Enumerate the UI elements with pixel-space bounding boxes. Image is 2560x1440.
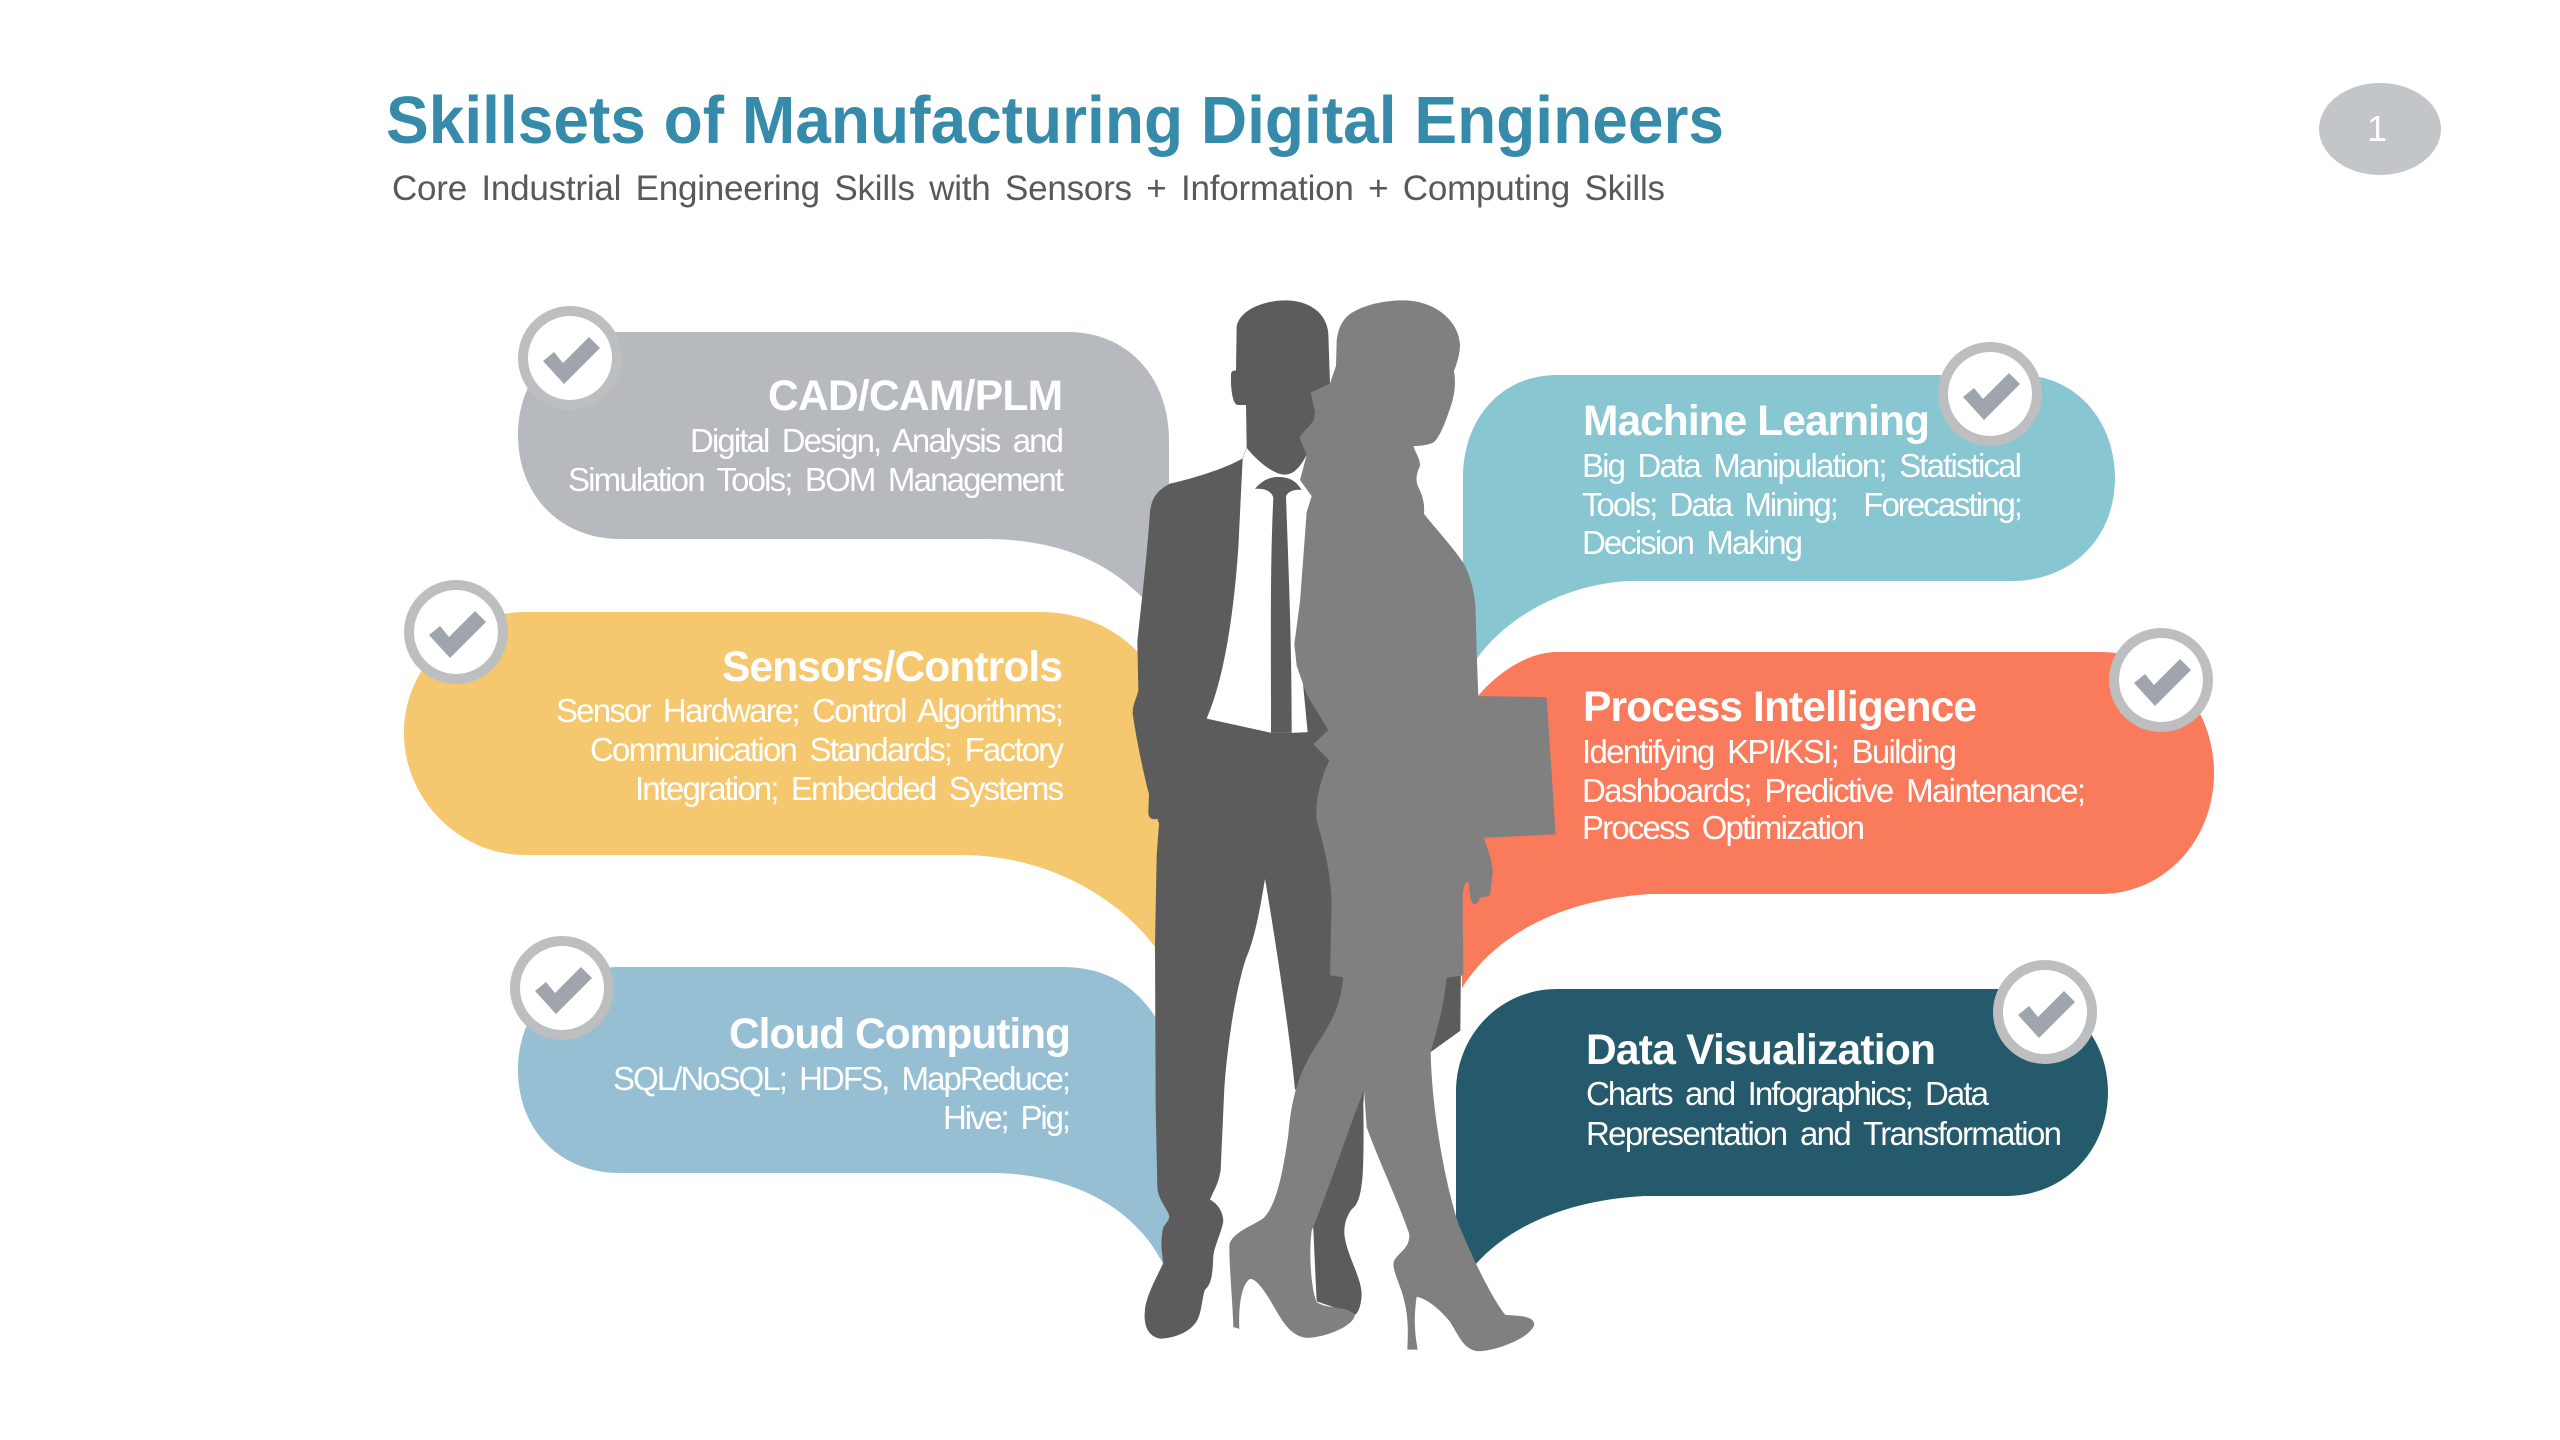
Sensors/Controls text: Communication Standards; Factory xyxy=(590,731,1064,768)
Machine Learning text: Big Data Manipulation; Statistical xyxy=(1582,447,2022,484)
silhouette: woman xyxy=(1229,300,1556,1351)
Data Visualization text: Charts and Infographics; Data xyxy=(1586,1075,1990,1112)
icon: check Cloud Computing xyxy=(515,941,609,1035)
Cloud Computing text xyxy=(613,1011,1071,1136)
panel: Process Intelligence bubble xyxy=(1462,652,2214,988)
CAD/CAM/PLM text xyxy=(568,373,1064,498)
Data Visualization text: Data Visualization xyxy=(1586,1027,1936,1074)
panel: Machine Learning bubble xyxy=(1463,375,2115,680)
icon: check Sensors/Controls xyxy=(409,585,503,679)
Machine Learning text xyxy=(1582,398,2023,561)
CAD/CAM/PLM text: Simulation Tools; BOM Management xyxy=(568,461,1064,498)
Process Intelligence text: Identifying KPI/KSI; Building xyxy=(1582,733,1957,770)
icon: check Process Intelligence xyxy=(2114,633,2208,727)
panel: Cloud Computing bubble xyxy=(518,967,1172,1280)
title: Skillsets of Manufacturing Digital Engineers xyxy=(386,83,1724,158)
Machine Learning text: Decision Making xyxy=(1582,524,1803,561)
Machine Learning text: Machine Learning xyxy=(1583,398,1930,445)
Cloud Computing text: Cloud Computing xyxy=(729,1011,1071,1058)
Process Intelligence text: Process Optimization xyxy=(1582,809,1865,846)
Data Visualization text: Representation and Transformation xyxy=(1586,1115,2062,1152)
Cloud Computing text: Hive; Pig; xyxy=(943,1099,1071,1136)
Process Intelligence text xyxy=(1582,684,2086,846)
silhouette: man xyxy=(1133,300,1462,1339)
panel: Data Visualization bubble xyxy=(1456,989,2108,1265)
panel: Sensors/Controls bubble xyxy=(404,612,1170,960)
page number badge xyxy=(2319,83,2441,175)
Process Intelligence text: Process Intelligence xyxy=(1583,684,1977,731)
Sensors/Controls text: Integration; Embedded Systems xyxy=(635,770,1064,807)
CAD/CAM/PLM text: CAD/CAM/PLM xyxy=(768,373,1063,420)
icon: check Data Visualization xyxy=(1998,965,2092,1059)
icon: check Machine Learning xyxy=(1943,347,2037,441)
Sensors/Controls text xyxy=(556,644,1064,807)
Cloud Computing text: SQL/NoSQL; HDFS, MapReduce; xyxy=(613,1060,1071,1097)
Sensors/Controls text: Sensors/Controls xyxy=(722,644,1063,691)
page number badge: 1 xyxy=(2367,108,2387,149)
Data Visualization text xyxy=(1586,1027,2062,1152)
panel: CAD/CAM/PLM bubble xyxy=(518,332,1169,620)
CAD/CAM/PLM text: Digital Design, Analysis and xyxy=(690,422,1064,459)
Machine Learning text: Tools; Data Mining; Forecasting; xyxy=(1582,486,2023,523)
subtitle: Core Industrial Engineering Skills with Sensors + Information + Computing Skills xyxy=(392,169,1665,208)
icon: check CAD/CAM/PLM xyxy=(523,311,617,405)
Process Intelligence text: Dashboards; Predictive Maintenance; xyxy=(1582,772,2086,809)
Sensors/Controls text: Sensor Hardware; Control Algorithms; xyxy=(556,692,1064,729)
